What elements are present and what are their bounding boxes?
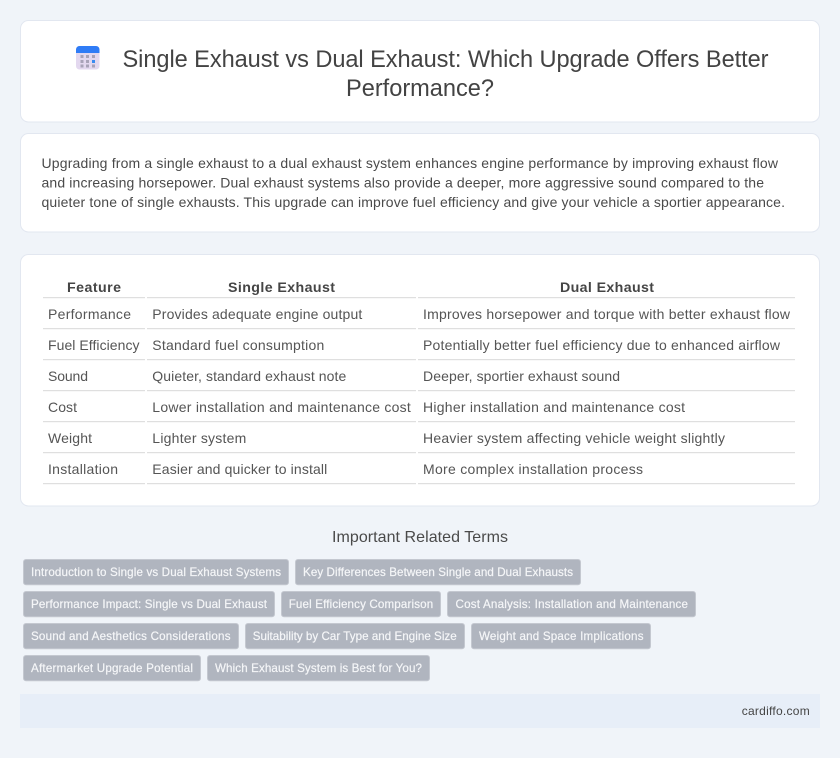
panel: introduction text: quieter tone of single exhausts. This upgrade can improve fuel efficiency and give your vehicle a sportier appearance. bbox=[42, 194, 785, 210]
tag: key differences bbox=[296, 560, 580, 585]
panel: introduction text bbox=[20, 134, 820, 232]
row: sound: Sound bbox=[48, 368, 88, 384]
panel: comparison table bbox=[20, 254, 820, 506]
row: installation: More complex installation process bbox=[423, 461, 643, 477]
tag: aftermarket: Aftermarket Upgrade Potential bbox=[31, 662, 193, 675]
tag: which system: Which Exhaust System is Best for You? bbox=[215, 662, 423, 675]
tag: sound and aesthetics: Sound and Aesthetics Considerations bbox=[31, 630, 231, 643]
row: performance: Improves horsepower and torque with better exhaust flow bbox=[423, 306, 791, 322]
row: fuel efficiency: Fuel Efficiency bbox=[48, 337, 140, 353]
icon: calendar bbox=[76, 46, 100, 70]
heading: main title bbox=[122, 47, 769, 102]
table header: Feature bbox=[67, 280, 121, 296]
row: performance bbox=[43, 306, 795, 329]
heading: related terms: Important Related Terms bbox=[332, 529, 508, 546]
row: cost: Higher installation and maintenance cost bbox=[423, 399, 685, 415]
heading: main title: Performance? bbox=[346, 76, 494, 102]
row: weight: Heavier system affecting vehicle weight slightly bbox=[423, 430, 725, 446]
tag: performance impact: Performance Impact: Single vs Dual Exhaust bbox=[31, 598, 268, 611]
panel: introduction text: Upgrading from a single exhaust to a dual exhaust system enhances engine performance by improving exhaust flow bbox=[42, 155, 779, 171]
row: installation bbox=[43, 461, 795, 484]
row: fuel efficiency: Standard fuel consumption bbox=[152, 337, 324, 353]
tag: weight and space: Weight and Space Implications bbox=[479, 630, 644, 643]
tag: aftermarket bbox=[24, 656, 200, 681]
tag: suitability bbox=[246, 624, 464, 649]
row: cost bbox=[43, 399, 795, 422]
tag: cost analysis bbox=[448, 592, 696, 617]
row: sound: Deeper, sportier exhaust sound bbox=[423, 368, 620, 384]
tag: suitability: Suitability by Car Type and Engine Size bbox=[253, 630, 457, 643]
footer: cardiffo.com bbox=[742, 704, 810, 718]
row: performance: Provides adequate engine output bbox=[152, 306, 362, 322]
tag: performance impact bbox=[24, 592, 274, 617]
tag: which system bbox=[208, 656, 430, 681]
tag: cost analysis: Cost Analysis: Installation and Maintenance bbox=[456, 598, 688, 611]
tag: key differences: Key Differences Between Single and Dual Exhausts bbox=[303, 566, 573, 579]
row: weight: Lighter system bbox=[152, 430, 246, 446]
row: fuel efficiency bbox=[43, 337, 795, 360]
panel: title bbox=[20, 20, 820, 122]
table header bbox=[43, 280, 795, 298]
panel: introduction text: and increasing horsepower. Dual exhaust systems also provide a deeper, more aggressive sound compared to the bbox=[42, 174, 764, 190]
tag: sound and aesthetics bbox=[24, 624, 238, 649]
row: sound bbox=[43, 368, 795, 391]
tag: introduction bbox=[24, 560, 288, 585]
row: fuel efficiency: Potentially better fuel efficiency due to enhanced airflow bbox=[423, 337, 781, 353]
tag: weight and space bbox=[472, 624, 650, 649]
row: sound: Quieter, standard exhaust note bbox=[152, 368, 347, 384]
footer bbox=[20, 694, 820, 728]
row: cost: Cost bbox=[48, 399, 77, 415]
row: installation: Installation bbox=[48, 461, 118, 477]
row: performance: Performance bbox=[48, 306, 131, 322]
table header: Dual Exhaust bbox=[560, 280, 654, 296]
tag: introduction: Introduction to Single vs Dual Exhaust Systems bbox=[31, 566, 281, 579]
tag: fuel efficiency: Fuel Efficiency Comparison bbox=[289, 598, 433, 611]
tag: fuel efficiency bbox=[282, 592, 440, 617]
table header: Single Exhaust bbox=[228, 280, 335, 296]
row: weight: Weight bbox=[48, 430, 92, 446]
row: weight bbox=[43, 430, 795, 453]
row: installation: Easier and quicker to install bbox=[152, 461, 327, 477]
row: cost: Lower installation and maintenance cost bbox=[152, 399, 411, 415]
heading: main title: Single Exhaust vs Dual Exhaust: Which Upgrade Offers Better bbox=[122, 47, 769, 73]
panel: related term tags bbox=[24, 560, 696, 681]
